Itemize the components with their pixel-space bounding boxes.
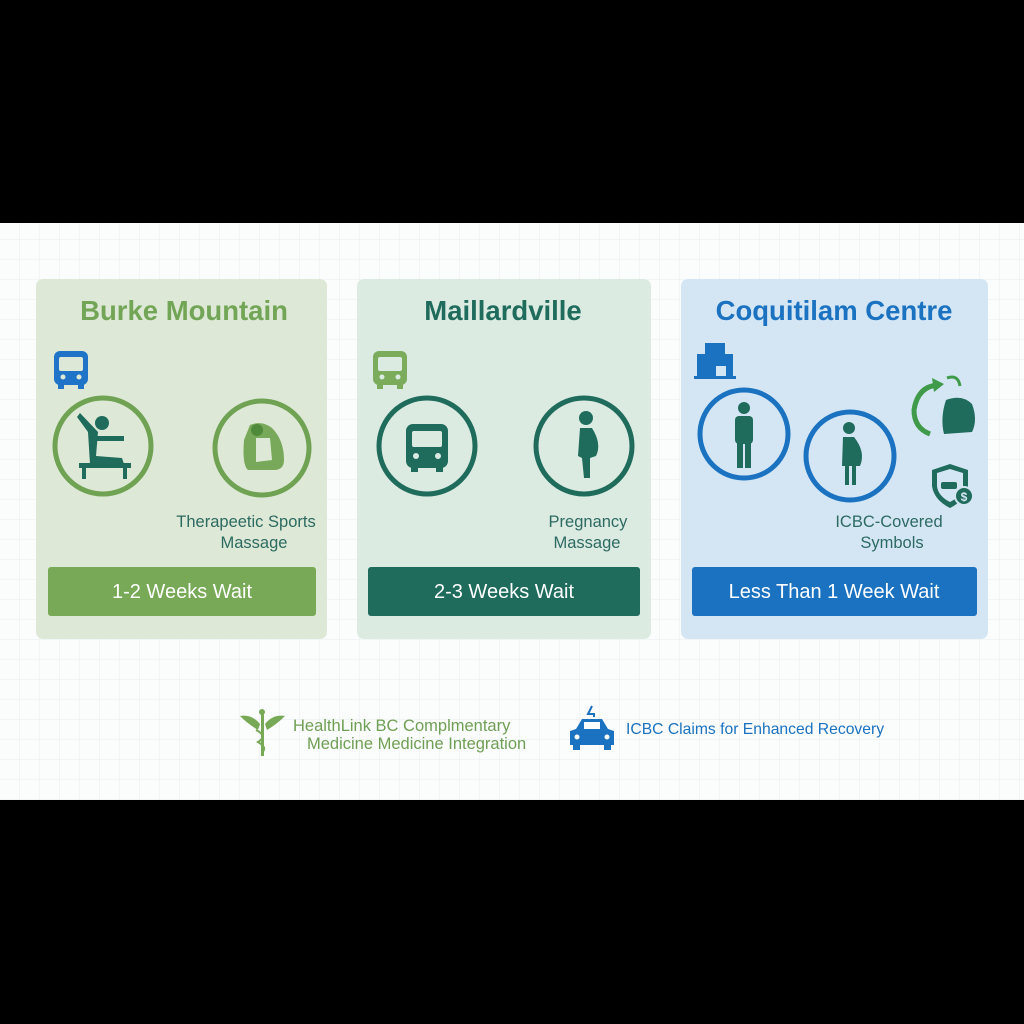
legend: HealthLink BC: Medicine Medicine Integration (307, 735, 526, 753)
icon: bus green (373, 351, 407, 389)
panel: Coquitilam Centre: Symbols (860, 534, 924, 552)
heading: Coquitilam Centre: Coquitilam Centre (716, 295, 952, 326)
label: Pregnancy Massage: Pregnancy (549, 513, 628, 531)
icon: shield dollar: $ (961, 490, 968, 504)
legend: ICBC Claims (570, 706, 884, 750)
button: Less Than 1 Week Wait (692, 567, 977, 616)
button: 2-3 Weeks Wait (368, 567, 640, 616)
icon: caduceus (240, 709, 285, 756)
panel: Maillardville (357, 279, 651, 639)
heading: Burke Mountain: Burke Mountain (80, 295, 288, 326)
panel: Burke Mountain: Massage (221, 534, 287, 552)
legend: HealthLink BC: HealthLink BC Complmentary (293, 717, 511, 735)
icon: car (570, 706, 614, 750)
panel: Maillardville: Massage (554, 534, 620, 552)
button: 1-2 Weeks Wait: 1-2 Weeks Wait (112, 581, 252, 603)
label: Therapeetic Sports Massage: Therapeetic Sports (176, 513, 316, 531)
icon: pilates circle (55, 398, 151, 494)
button: 2-3 Weeks Wait: 2-3 Weeks Wait (434, 581, 574, 603)
icon: building (694, 343, 736, 379)
heading: Maillardville: Maillardville (424, 295, 582, 326)
icon: muscle circle (215, 401, 309, 495)
icon: pregnant circle (806, 412, 894, 500)
icon: person circle (700, 390, 788, 478)
icon: recovery arrow muscle (914, 377, 975, 434)
button: Less Than 1 Week Wait: Less Than 1 Week Wait (729, 581, 940, 603)
icon: shield dollar (932, 464, 973, 508)
panel: Burke Mountain (36, 279, 327, 639)
icon: pregnancy circle (536, 398, 632, 494)
legend: HealthLink BC (240, 709, 526, 756)
legend: ICBC Claims: ICBC Claims for Enhanced Recovery (626, 721, 884, 738)
icon: bus circle (379, 398, 475, 494)
button: 1-2 Weeks Wait (48, 567, 316, 616)
icon: bus blue (54, 351, 88, 389)
panel: Coquitilam Centre (681, 279, 988, 639)
label: ICBC-Covered Symbols: ICBC-Covered (835, 513, 943, 531)
